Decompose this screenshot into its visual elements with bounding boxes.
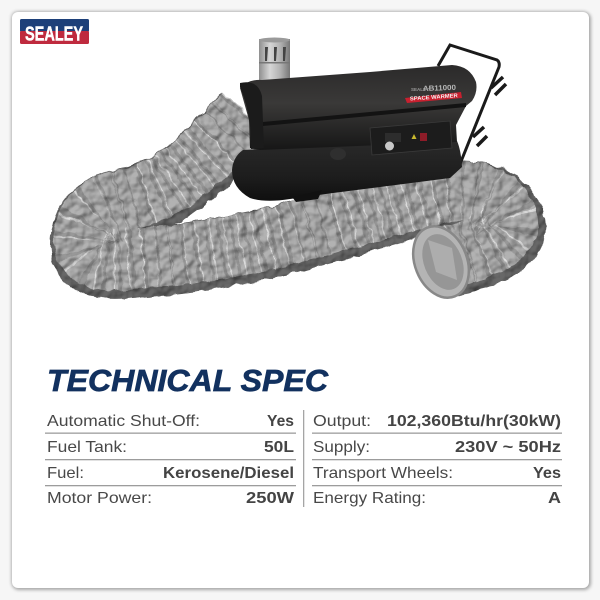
row: energy rating: Energy Rating: xyxy=(313,490,426,507)
filler cap xyxy=(330,148,346,160)
row: fuel xyxy=(47,465,294,482)
row: motor power xyxy=(47,490,295,507)
row: output: 102,360Btu/hr(30kW) xyxy=(387,413,561,430)
logo: Sealey: SEALEY xyxy=(25,24,83,46)
row: fuel tank: Fuel Tank: xyxy=(47,439,127,456)
row: automatic shut-off xyxy=(47,413,294,430)
row: automatic shut-off: Yes xyxy=(267,413,294,430)
product image: fuel tank base xyxy=(232,141,462,201)
row: output xyxy=(313,413,561,430)
product image: wheel xyxy=(292,190,322,202)
hose open end xyxy=(403,218,479,306)
row: energy rating: A xyxy=(548,490,561,507)
product image: heater barrel xyxy=(240,65,476,150)
row: fuel tank xyxy=(47,439,294,456)
product label: model and Space Warmer: AB11000 xyxy=(423,83,456,93)
barrel front ring xyxy=(240,82,264,149)
row: energy rating xyxy=(313,490,561,507)
product label: model and Space Warmer: SPACE WARMER xyxy=(410,93,458,102)
table divider xyxy=(303,410,304,507)
table: right specifications xyxy=(312,413,562,507)
barrel body strip xyxy=(263,103,466,126)
product image: chimney flue xyxy=(259,38,290,83)
row: transport wheels xyxy=(313,465,561,482)
product image: handle xyxy=(438,45,506,164)
row: fuel: Fuel: xyxy=(47,465,84,482)
row: supply: Supply: xyxy=(313,439,370,456)
product label: model and Space Warmer: SEALEY xyxy=(411,87,429,92)
row: supply: 230V ~ 50Hz xyxy=(455,439,561,456)
row: transport wheels: Yes xyxy=(533,465,561,482)
row: motor power: Motor Power: xyxy=(47,490,152,507)
table: left specifications xyxy=(45,413,296,507)
row: fuel: Kerosene/Diesel xyxy=(163,465,294,482)
product image: control panel xyxy=(370,121,452,155)
row: automatic shut-off: Automatic Shut-Off: xyxy=(47,413,200,430)
heading: TECHNICAL SPEC xyxy=(47,363,329,398)
row: transport wheels: Transport Wheels: xyxy=(313,465,453,482)
logo: Sealey xyxy=(20,19,89,46)
row: motor power: 250W xyxy=(246,490,295,507)
product label: model and Space Warmer xyxy=(405,83,462,103)
product image: flexible ducting hose xyxy=(84,113,511,264)
row: output: Output: xyxy=(313,413,371,430)
row: supply xyxy=(313,439,561,456)
row: fuel tank: 50L xyxy=(264,439,294,456)
